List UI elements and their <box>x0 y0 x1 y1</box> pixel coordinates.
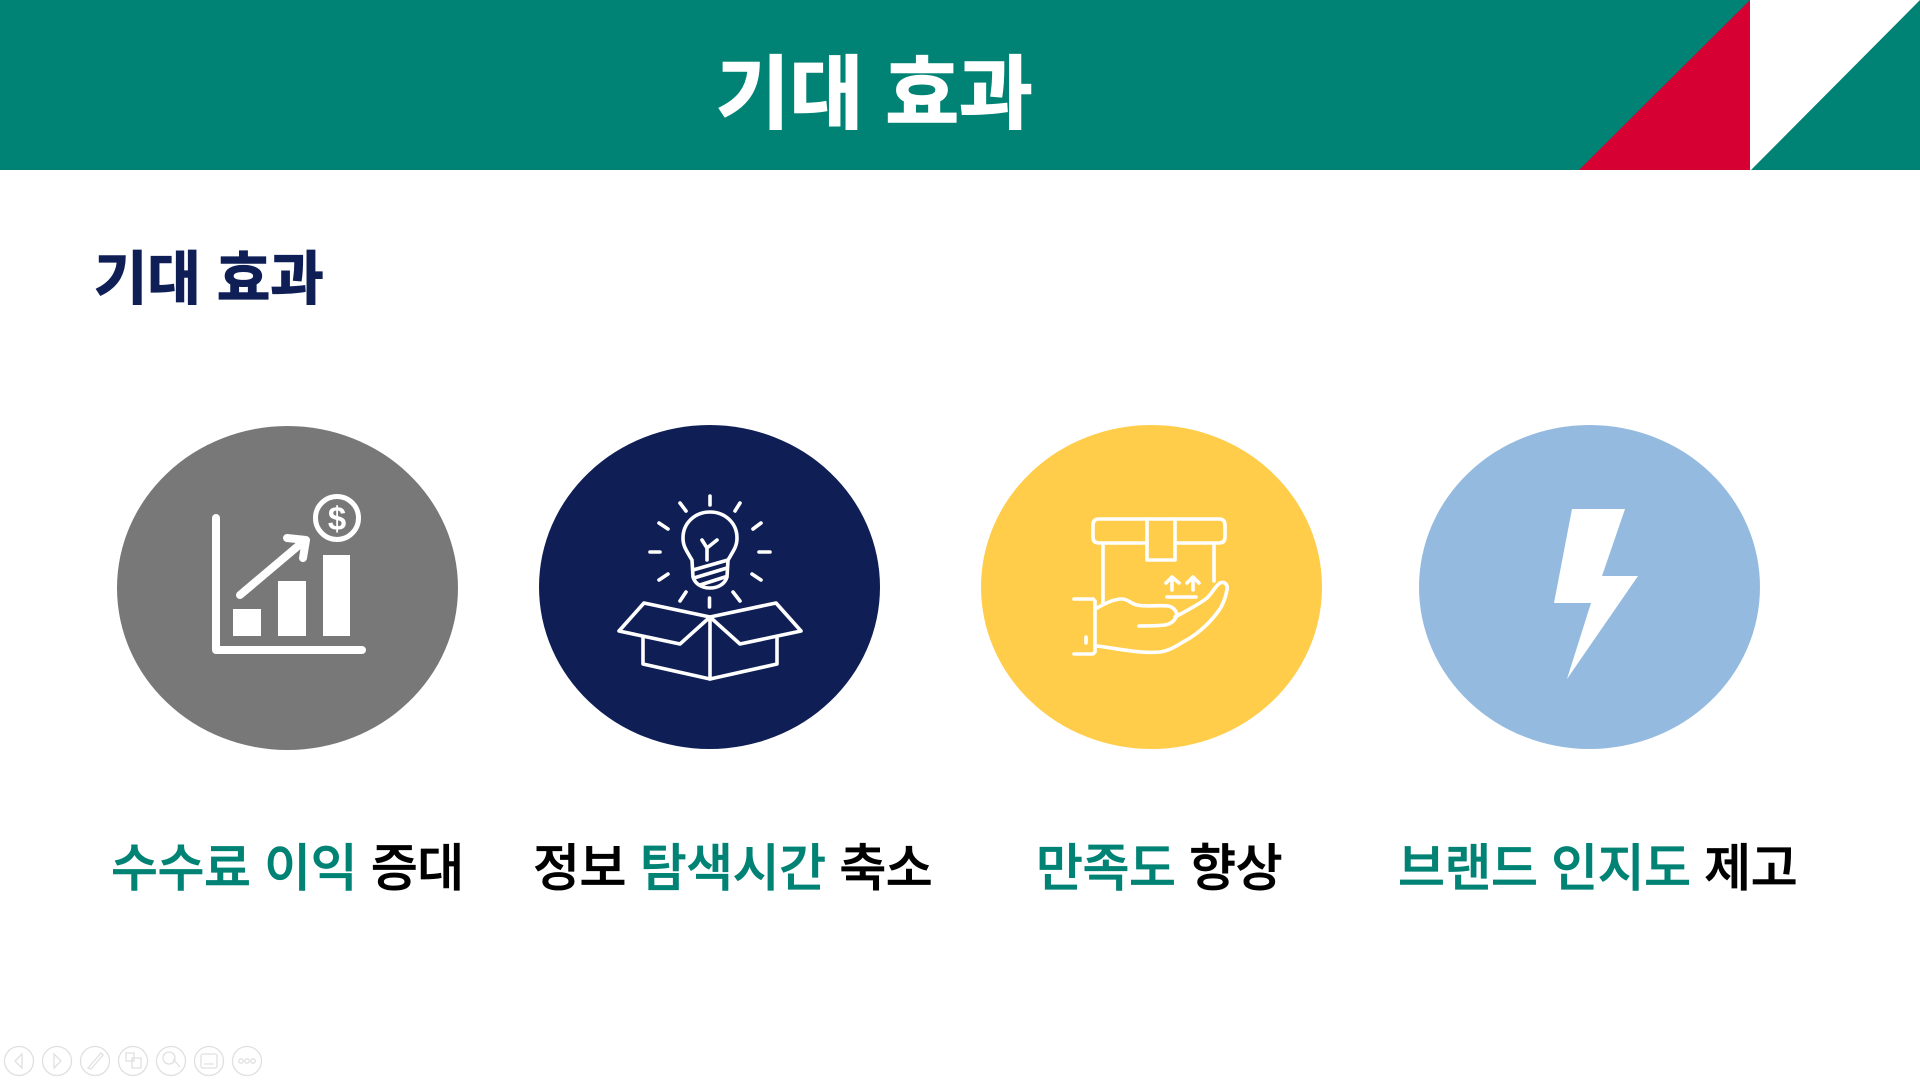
panel: light blue circle with lightning icon <box>1419 425 1760 749</box>
icon: parcel held in hand <box>1074 519 1227 654</box>
title: 기대 효과 <box>716 50 1033 139</box>
icon: growth chart with dollar coin: $ <box>328 500 346 537</box>
icon: growth chart with dollar coin <box>216 496 362 650</box>
panel: navy circle with idea box icon <box>539 425 880 749</box>
icon: lightning bolt <box>1554 509 1638 679</box>
label: satisfaction: 만족도 향상 <box>1036 840 1282 897</box>
label: search time: 정보 탐색시간 축소 <box>533 840 932 897</box>
panel: yellow circle with parcel in hand icon <box>981 425 1322 749</box>
section heading: 기대 효과 <box>94 247 324 312</box>
label: commission profit: 수수료 이익 증대 <box>111 840 464 897</box>
panel: gray circle with growth chart icon <box>117 426 458 750</box>
slideshow toolbar icons <box>4 1046 262 1076</box>
icon: light bulb rising from open box <box>619 496 801 679</box>
header band <box>0 0 1920 170</box>
label: brand awareness: 브랜드 인지도 제고 <box>1398 840 1797 897</box>
